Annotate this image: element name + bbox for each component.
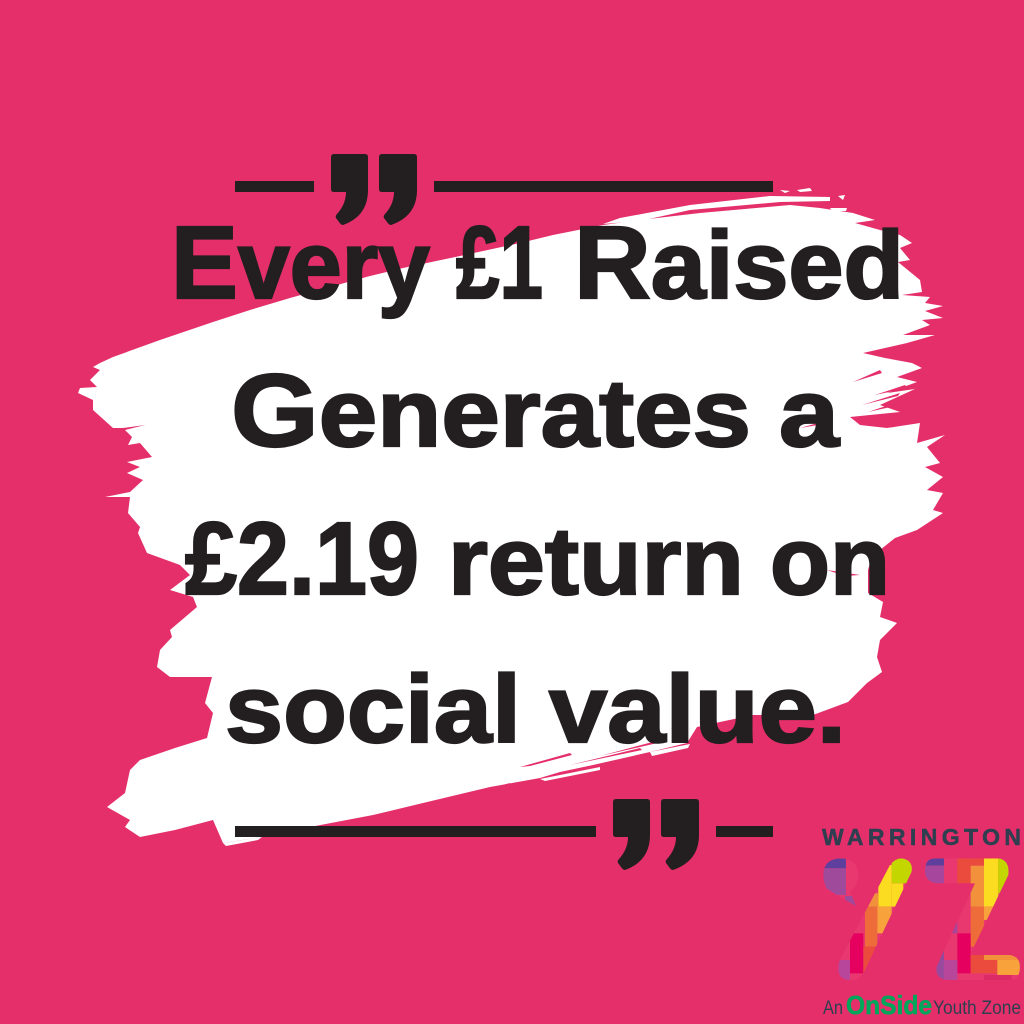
heading: [171, 205, 904, 763]
icon: bottom quotation marks: [613, 799, 699, 870]
line 2: Generates: [231, 353, 751, 468]
logo tagline: An: [823, 998, 843, 1019]
logo YZ mark: [820, 857, 1023, 982]
line 1: Raised: [574, 205, 904, 320]
upper right white streaks: [603, 188, 847, 224]
bottom quote rule left: [235, 826, 596, 837]
line 1: £1: [456, 205, 543, 320]
logo wordmark: WARRINGTON: [822, 824, 1021, 850]
line 3: return: [448, 508, 744, 615]
line 3: £2.19: [185, 501, 419, 616]
line 3: on: [770, 508, 890, 615]
logo tagline: OnSide: [846, 990, 932, 1020]
line 1: Every: [171, 205, 430, 320]
logo tagline: [823, 990, 1021, 1020]
line 3: [185, 501, 890, 616]
line 2: a: [779, 360, 840, 467]
bottom quote rule right: [716, 826, 773, 837]
logo: Warrington Youth Zone: [820, 824, 1023, 1020]
top quote rule left: [235, 181, 314, 192]
line 4: value.: [549, 656, 846, 763]
top quote rule right: [434, 181, 773, 192]
icon: top quotation marks: [331, 154, 417, 225]
line 4: [225, 656, 846, 763]
line 1: [171, 205, 904, 320]
line 4: social: [225, 656, 521, 763]
white paint brush stroke: [78, 188, 945, 846]
pink slits on the right side: [478, 370, 907, 792]
lower white streaks: [223, 744, 690, 846]
